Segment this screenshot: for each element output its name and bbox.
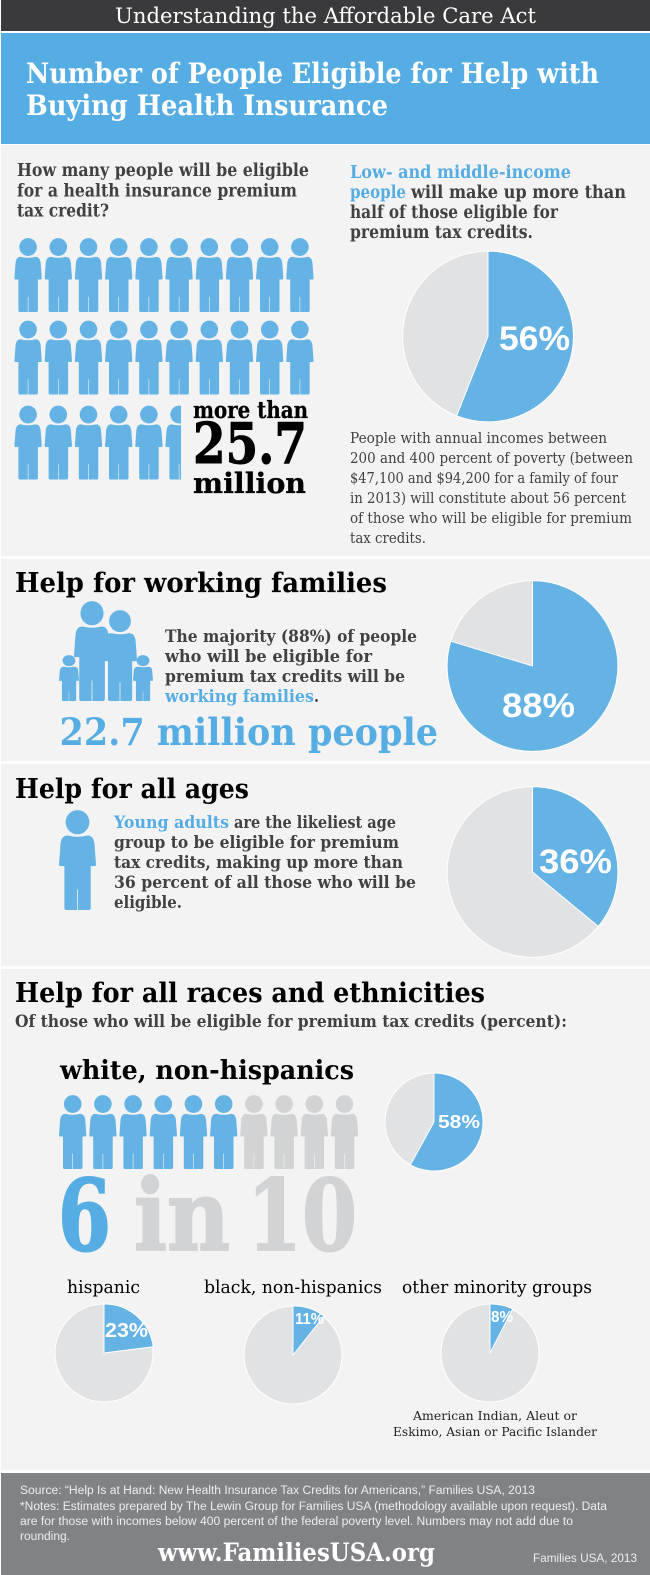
source notes: rounding. (20, 1531, 70, 1543)
pie chart: 56 percent: 56% (499, 320, 570, 358)
low and middle income heading: people (350, 183, 406, 203)
panel: working families (1, 559, 650, 761)
top title bar: Understanding the Affordable Care Act (115, 4, 537, 28)
question heading: for a health insurance premium (17, 182, 297, 202)
big text: 6 in 10: in (134, 1159, 230, 1274)
low and middle income heading: will make up more than (410, 183, 626, 203)
icon row: 6 in 10 people (59, 1095, 358, 1169)
low and middle income heading: half of those eligible for (350, 203, 559, 223)
description text: working families (164, 687, 314, 707)
description text: premium tax credits will be (165, 667, 405, 687)
income paragraph (350, 431, 633, 547)
big number: more than 25.7 million: 25.7 (193, 411, 307, 477)
website: www.FamiliesUSA.org (157, 1538, 435, 1567)
income paragraph: tax credits. (350, 531, 426, 547)
income paragraph: in 2013) will constitute about 56 percent (350, 491, 626, 507)
main title banner: Number of People Eligible for Help with (26, 57, 599, 90)
description text: eligible. (114, 893, 182, 913)
description text: who will be eligible for (164, 647, 373, 667)
question heading (17, 161, 309, 222)
income paragraph: 200 and 400 percent of poverty (between (350, 451, 633, 467)
footer (1, 1473, 650, 1575)
pie chart: 36 percent (447, 787, 618, 957)
low and middle income heading: Low- and middle-income (350, 163, 571, 183)
black, non-hispanics group: 11% (295, 1311, 324, 1328)
main title banner: Buying Health Insurance (26, 89, 388, 122)
source notes: are for those with incomes below 400 percent of the federal poverty level. Numbers may not add due to (20, 1516, 573, 1528)
source notes: Source: “Help Is at Hand: New Health Insurance Tax Credits for Americans,” Families USA, 2013 (20, 1485, 535, 1497)
panel: all ages (1, 764, 650, 966)
income paragraph: $47,100 and $94,200 for a family of four (350, 471, 618, 487)
question heading: tax credit? (17, 202, 109, 222)
description text: tax credits, making up more than (114, 853, 403, 873)
big number: more than 25.7 million: more than (193, 397, 308, 424)
source notes: *Notes: Estimates prepared by The Lewin Group for Families USA (methodology available upon request). Data (20, 1501, 608, 1513)
other minority groups: American Indian, Aleut or (412, 1408, 577, 1423)
panel: races and ethnicities (1, 969, 650, 1470)
low and middle income heading: premium tax credits. (350, 223, 533, 243)
description text: Young adults (113, 813, 229, 833)
top title bar (1, 0, 650, 31)
other minority groups: other minority groups (402, 1277, 592, 1298)
description text (113, 813, 416, 913)
source notes (20, 1485, 608, 1543)
pie chart: 88 percent (447, 581, 618, 751)
hispanic group: hispanic (67, 1277, 140, 1298)
heading: Help for all races and ethnicities (15, 978, 485, 1009)
credit: Families USA, 2013 (533, 1551, 637, 1565)
pie chart: 56 percent (403, 251, 573, 422)
label: white, non-hispanics: white, non-hispanics (59, 1056, 354, 1086)
icon grid: people (14, 238, 314, 480)
big number: more than 25.7 million: million (193, 467, 306, 500)
heading: Help for all ages (15, 774, 249, 805)
other minority groups (393, 1277, 597, 1439)
description text: are the likeliest age (234, 813, 396, 833)
black, non-hispanics group (204, 1277, 382, 1404)
description text: group to be eligible for premium (114, 833, 399, 853)
description text (164, 627, 417, 707)
icon: young adult (59, 810, 96, 910)
other minority groups: Eskimo, Asian or Pacific Islander (393, 1424, 597, 1439)
pie chart: 36 percent: 36% (539, 843, 612, 881)
hispanic group: 23% (105, 1320, 148, 1342)
pie chart: 88 percent: 88% (502, 687, 575, 725)
hispanic group (55, 1277, 153, 1402)
big number: more than 25.7 million (193, 397, 308, 500)
subheading: Of those who will be eligible for premium tax credits (percent): (15, 1012, 567, 1032)
description text: . (314, 687, 319, 707)
icon: family (59, 601, 153, 701)
pie chart: 58 percent: 58% (438, 1112, 480, 1132)
main title banner (1, 33, 650, 144)
income paragraph: of those who will be eligible for premium (350, 511, 632, 527)
big text: 6 in 10: 6 (58, 1159, 111, 1274)
description text: 36 percent of all those who will be (114, 873, 416, 893)
question heading: How many people will be eligible (17, 161, 309, 181)
low and middle income heading (350, 163, 626, 243)
heading: Help for working families (15, 568, 387, 599)
other minority groups: 8% (491, 1309, 513, 1326)
black, non-hispanics group: black, non-hispanics (204, 1277, 382, 1298)
big text: 6 in 10: 10 (247, 1159, 357, 1274)
pie chart: 58 percent (385, 1073, 483, 1171)
panel: how many people eligible (1, 145, 650, 556)
income paragraph: People with annual incomes between (350, 431, 607, 447)
description text: The majority (88%) of people (165, 627, 417, 647)
big number: 22.7 million people: 22.7 million people (60, 710, 438, 754)
big text: 6 in 10 (58, 1159, 357, 1274)
